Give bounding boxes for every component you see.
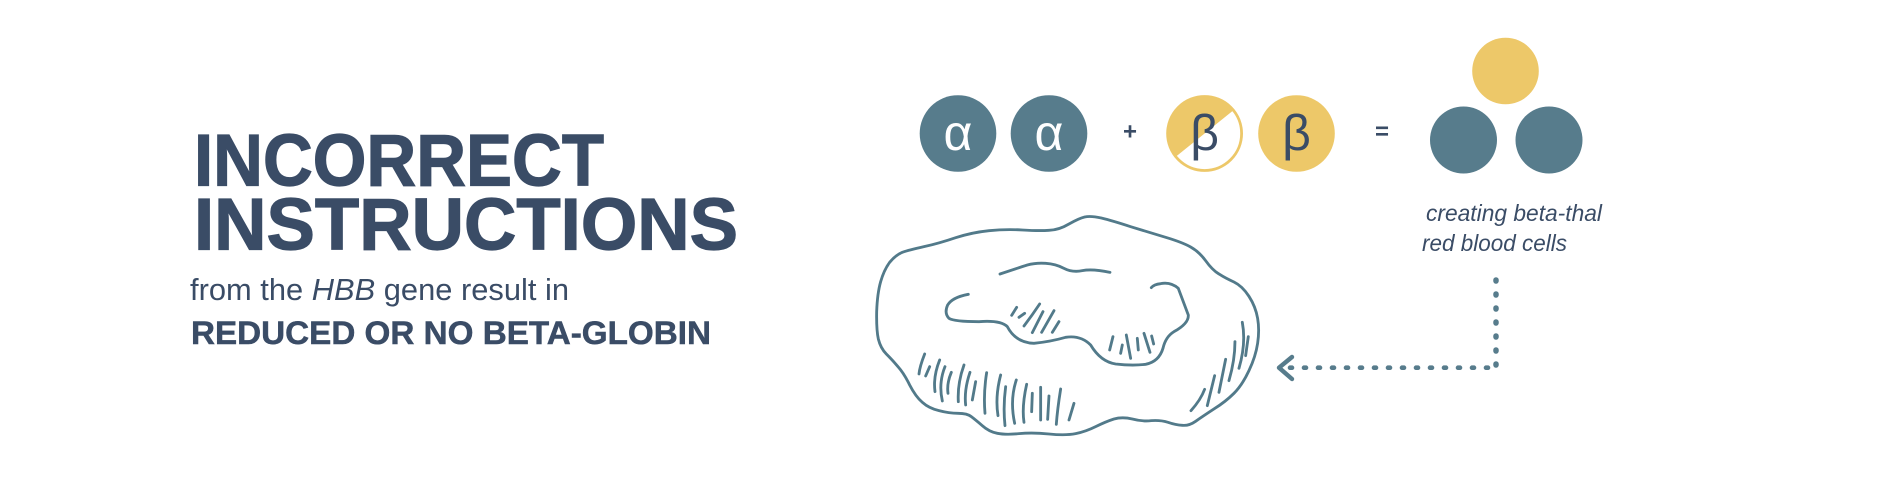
caption line 1: creating beta-thal — [1426, 200, 1603, 226]
plus sign: + — [1123, 118, 1137, 146]
alpha circle 1 — [920, 95, 996, 172]
title line 1: INCORRECT — [194, 120, 604, 202]
caption — [1422, 200, 1603, 256]
equation: globin chains — [920, 38, 1582, 174]
damaged beta circle — [1167, 96, 1242, 170]
title line 2: INSTRUCTIONS — [194, 184, 738, 266]
subtitle emphasis: REDUCED OR NO BETA-GLOBIN — [191, 315, 711, 351]
alpha circle 2: α — [1035, 105, 1063, 161]
caption line 2: red blood cells — [1422, 230, 1567, 256]
alpha circle 2 — [1011, 95, 1087, 172]
subtitle: from the HBB gene result in — [190, 272, 569, 307]
damaged beta circle: β — [1190, 105, 1219, 161]
heading block — [190, 120, 738, 351]
illustration: misshapen red blood cell — [877, 217, 1259, 435]
alpha circle 1: α — [944, 105, 972, 161]
equals sign: = — [1375, 118, 1389, 146]
dotted arrow from caption to cell — [1279, 280, 1496, 379]
beta circle: β — [1282, 105, 1311, 161]
result: hemoglobin cluster — [1430, 38, 1582, 174]
beta circle — [1258, 95, 1335, 172]
